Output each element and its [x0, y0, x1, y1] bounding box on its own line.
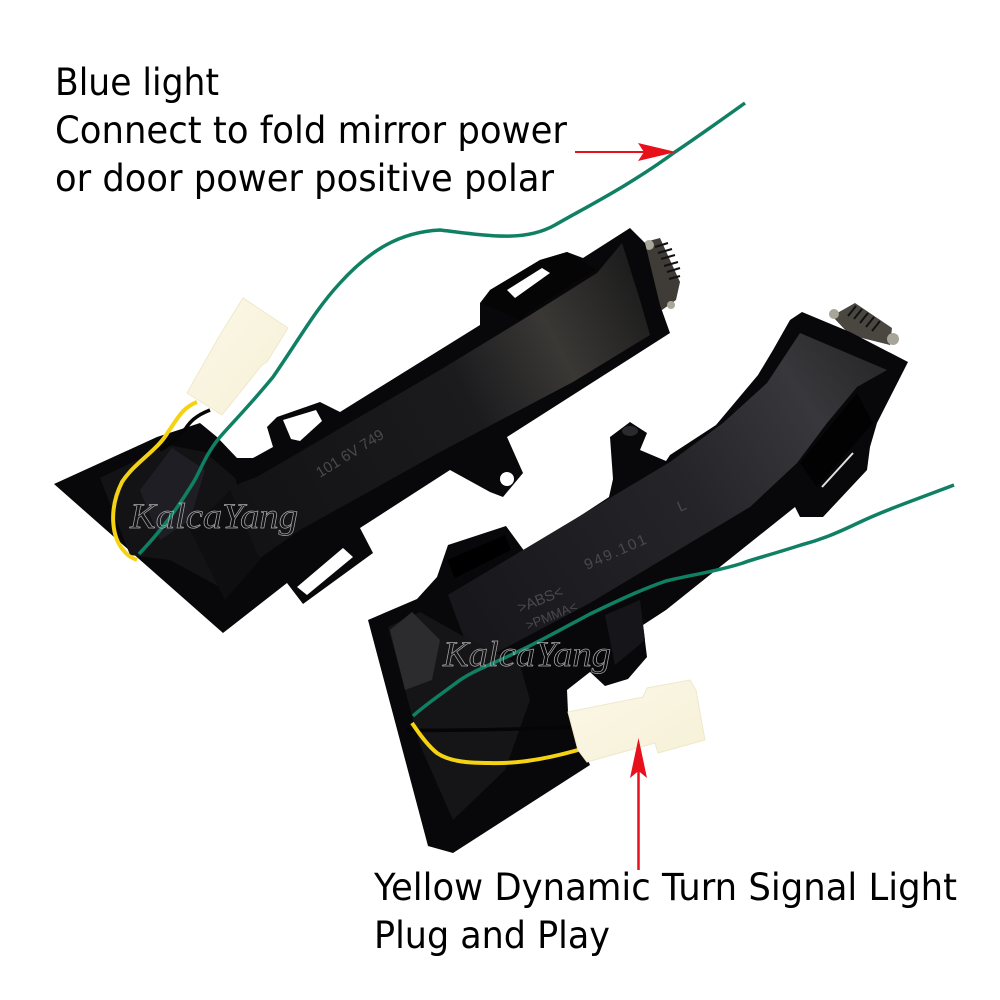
caption: yellow signal — [373, 866, 957, 957]
right unit stem hole — [622, 426, 638, 436]
right black wire — [407, 727, 573, 730]
right unit housing — [368, 312, 908, 853]
right unit moulded marks: >ABS< — [515, 583, 566, 617]
watermark right: KalcaYang — [442, 634, 611, 674]
caption: yellow signal: Plug and Play — [374, 914, 610, 957]
mounting hardware right unit — [829, 303, 899, 345]
left unit tip panel — [100, 445, 250, 590]
right unit moulded marks — [515, 497, 689, 633]
right unit moulded marks: >PMMA< — [524, 599, 579, 633]
heading: blue light instructions: Connect to fold mirror power — [55, 109, 568, 152]
left green wire to arrow — [139, 103, 745, 554]
left black wire — [160, 410, 210, 450]
left white connector — [187, 298, 288, 415]
left yellow wire — [113, 402, 197, 560]
mounting hardware left unit — [644, 238, 680, 310]
arrow: blue light wire — [575, 143, 676, 161]
heading: blue light instructions: or door power positive polar — [55, 157, 555, 200]
caption: yellow signal: Yellow Dynamic Turn Signal Light — [373, 866, 957, 909]
right mirror turn signal unit — [368, 303, 908, 853]
left unit clip windows — [283, 268, 550, 595]
heading: blue light instructions — [55, 61, 568, 200]
right unit tip panel — [388, 612, 530, 820]
heading: blue light instructions: Blue light — [55, 61, 219, 104]
right unit moulded marks: 949.101 — [582, 530, 651, 574]
left mirror turn signal unit — [54, 228, 680, 633]
left unit moulded marks: 101 6V 749 — [313, 426, 387, 481]
left unit clip on top edge — [483, 252, 597, 320]
arrow: yellow connector — [630, 738, 647, 870]
left unit lens band — [222, 243, 650, 565]
left unit inner square — [140, 448, 205, 540]
right unit moulded marks: L — [675, 497, 689, 516]
watermark left: KalcaYang — [129, 496, 298, 536]
right unit lens band — [448, 333, 887, 654]
left unit facet — [190, 490, 260, 600]
left unit housing — [54, 228, 670, 633]
right unit clip windows — [447, 393, 873, 665]
right green wire — [413, 485, 954, 716]
right white connector — [568, 680, 705, 762]
right unit lit facet — [390, 612, 440, 690]
right yellow wire — [412, 723, 578, 763]
